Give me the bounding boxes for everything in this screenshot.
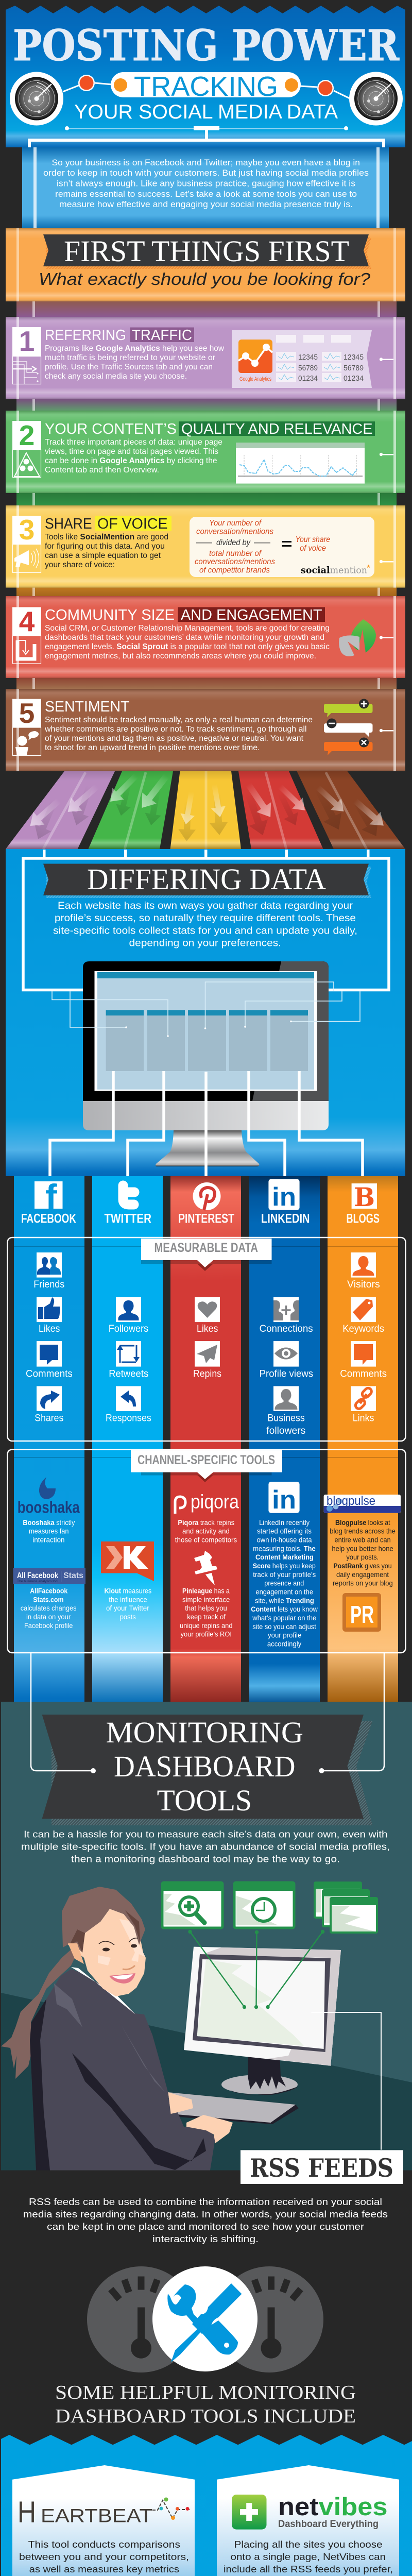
heading: share of voice xyxy=(45,516,171,532)
icon: speech bubbles positive negative neutral xyxy=(324,699,373,755)
heading: sentiment: SENTIMENT xyxy=(45,699,130,715)
logo: netvibes: netvibes xyxy=(278,2493,387,2521)
heading: community size and engagement: COMMUNITY SIZE xyxy=(45,607,175,623)
text: blogpulse xyxy=(330,1519,396,1587)
ribbon: monitoring dashboard tools xyxy=(42,1715,373,1825)
metric: facebook shares: Shares xyxy=(35,1413,63,1424)
logo: netvibes: Dashboard Everything xyxy=(278,2519,379,2530)
connector dot xyxy=(380,560,393,563)
text: sentiment paragraph: to shoot for an upward trend in positive mentions over time. xyxy=(45,743,260,752)
metric: linkedin business followers: followers xyxy=(266,1426,305,1436)
text: linkedin tools: presence and xyxy=(264,1580,304,1587)
text: linkedin tools: measuring tools. The xyxy=(253,1545,316,1552)
metric: facebook shares xyxy=(35,1386,63,1424)
logo: booshaka: booshaka xyxy=(18,1498,80,1517)
text: monitoring paragraph: multiple site-specific tools. If you have an abundance of social media profiles, xyxy=(21,1841,390,1852)
connector: thin lines into monitor xyxy=(52,982,360,1036)
text: linkedin tools: LinkedIn recently xyxy=(259,1519,310,1527)
column header: twitter xyxy=(104,1185,151,1226)
text: community paragraph: engagement metrics, but also recommends areas where you could improve. xyxy=(45,652,316,660)
illustration: woman at computer xyxy=(1,1887,233,2170)
text: blogpulse: daily engagement xyxy=(336,1571,389,1579)
metric: blog links xyxy=(351,1386,376,1424)
panel: 2 content quality xyxy=(6,411,405,493)
logo: allfacebook stats: All Facebook xyxy=(17,1571,58,1580)
text: community paragraph: engagement levels. Social Sprout is a popular tool that not only gives you basic xyxy=(45,642,330,651)
text: linkedin tools: engagement on the xyxy=(255,1588,313,1596)
text: pinleague: simple interface xyxy=(182,1596,230,1603)
text: booshaka: measures fan xyxy=(29,1528,69,1535)
text: linkedin tools: Score helps you keep xyxy=(253,1562,316,1570)
callout: share of voice equation: divided by xyxy=(216,538,251,547)
metric: facebook likes xyxy=(37,1297,62,1334)
metric: twitter retweets: Retweets xyxy=(109,1368,148,1379)
text: intro paragraph: isn’t always enough. Like any business practice, gauging how effective it is xyxy=(57,178,355,189)
icon: box with down arrow xyxy=(12,636,41,664)
panel: first things first xyxy=(6,228,405,301)
callout: share of voice equation xyxy=(190,517,374,577)
text: klout: the influence xyxy=(109,1596,147,1603)
connector bands between panels xyxy=(16,301,397,689)
text: heartbeat description xyxy=(19,2539,189,2576)
metric: twitter followers xyxy=(109,1297,148,1334)
logo: piqora: piqora xyxy=(191,1491,239,1513)
text: booshaka: Booshaka strictly xyxy=(23,1519,75,1527)
panel: differing data xyxy=(6,849,405,1176)
arrows: five coloured ramps into differing data xyxy=(6,770,405,849)
text: differing data paragraph xyxy=(53,900,357,949)
metric: pinterest repins xyxy=(193,1341,221,1379)
ribbon: monitoring dashboard tools: TOOLS xyxy=(157,1784,252,1817)
card: heartbeat xyxy=(12,2465,195,2576)
icon: right radar xyxy=(349,72,403,126)
subtitle: your social media data: YOUR SOCIAL MEDIA DATA xyxy=(74,101,338,123)
text: piqora: those of competitors xyxy=(175,1536,237,1544)
callout: share of voice equation: Your share xyxy=(296,535,330,544)
logo: postrank: PR xyxy=(350,1601,374,1629)
icon: clock window xyxy=(234,1883,294,1928)
text: differing data paragraph: depending on your preferences. xyxy=(129,938,281,949)
logo: booshaka xyxy=(18,1477,80,1517)
chart: content line chart xyxy=(236,443,365,484)
connector: lines from columns to ribbon xyxy=(31,1653,384,1773)
text: community paragraph: Social CRM, or Customer Relationship Management, tools are good for creating xyxy=(45,624,330,633)
icon: stacked windows xyxy=(315,1883,377,1933)
text: klout xyxy=(104,1587,152,1621)
text: content quality paragraph: views, time on page and total pages viewed. This xyxy=(45,447,218,456)
text: intro paragraph: So your business is on Facebook and Twitter; maybe you even have a blog in xyxy=(52,158,360,167)
metric: linkedin business followers: Business xyxy=(267,1413,305,1424)
text: share of voice paragraph: can use a simple equation to get xyxy=(45,551,161,560)
ribbon: monitoring dashboard tools: MONITORING xyxy=(106,1716,303,1749)
connector dot xyxy=(380,636,393,639)
label: channel-specific tools: CHANNEL-SPECIFIC TOOLS xyxy=(138,1453,275,1467)
panel: 1 referring traffic xyxy=(6,317,405,399)
logo: social sprout xyxy=(339,619,376,656)
logo: linkedin tools: in xyxy=(272,1485,296,1514)
panel: intro xyxy=(22,147,389,228)
icons: small stat tiles xyxy=(276,335,351,382)
illustration: keyboard xyxy=(168,2092,299,2124)
text: share of voice paragraph: for figuring out this data. And you xyxy=(45,542,165,551)
metric: facebook likes: Likes xyxy=(39,1324,60,1334)
heading: referring traffic: TRAFFIC xyxy=(132,327,192,344)
number badge 3 xyxy=(12,514,41,546)
metric: facebook friends: Friends xyxy=(33,1279,64,1290)
callout: share of voice equation: Your number of xyxy=(209,519,262,528)
text: linkedin tools: your profile xyxy=(268,1632,301,1639)
logo: postrank xyxy=(342,1593,381,1632)
icon: megaphone xyxy=(12,544,41,573)
logo: allfacebook stats: The business analytics tool xyxy=(17,1580,59,1583)
text: referring traffic paragraph xyxy=(45,344,225,381)
metric: blog keywords xyxy=(342,1297,384,1334)
text: netvibes description: include all the RSS feeds you prefer, xyxy=(224,2564,393,2574)
text: referring traffic paragraph: much traffic is being referred to your website or xyxy=(45,353,215,362)
text: intro paragraph xyxy=(43,158,369,209)
ribbon: first things first: FIRST THINGS FIRST xyxy=(64,234,349,268)
column header: pinterest xyxy=(178,1182,234,1226)
icon: left red node xyxy=(78,75,95,91)
subtitle: tracking pill: TRACKING xyxy=(134,71,278,102)
ribbon: differing data: DIFFERING DATA xyxy=(87,862,326,896)
heading: community size and engagement: AND ENGAGEMENT xyxy=(181,607,322,623)
connector: radar to tracking pill xyxy=(63,83,350,98)
text: stat numbers: 01234 xyxy=(344,374,364,383)
metric: blog comments xyxy=(340,1341,387,1379)
icon: gauges with wrench and screwdriver xyxy=(87,2266,323,2372)
text: monitoring paragraph: then a monitoring dashboard tool may be the way to go. xyxy=(71,1853,340,1864)
text: booshaka: interaction xyxy=(32,1536,65,1544)
panel: helpful tools xyxy=(1,2435,412,2576)
text: linkedin tools: site so you can adjust xyxy=(252,1623,316,1631)
heading: community size and engagement xyxy=(45,607,325,623)
text: sentiment paragraph: whether comments are positive or not. To track sentiment, go through all xyxy=(44,725,306,734)
connector: rss line xyxy=(312,2012,381,2150)
text: heartbeat description: as well as measures key metrics xyxy=(29,2564,179,2574)
text: stat numbers: 12345 xyxy=(298,353,318,362)
text: booshaka xyxy=(23,1519,75,1544)
text: referring traffic paragraph: check any social media site you choose. xyxy=(45,372,187,381)
logo: netvibes xyxy=(232,2493,387,2530)
text: klout: Klout measures xyxy=(104,1587,152,1595)
text: content quality paragraph: Content tab and then Overview. xyxy=(45,466,159,474)
column header: pinterest: PINTEREST xyxy=(178,1212,234,1226)
text: referring traffic paragraph: Programs like Google Analytics help you see how xyxy=(45,344,225,353)
text: pinleague: keep track of xyxy=(187,1613,226,1621)
heading: content quality xyxy=(45,421,375,437)
number badge 4 xyxy=(12,605,41,637)
text: stat numbers: 01234 xyxy=(298,374,318,383)
metric: linkedin connections: Connections xyxy=(260,1324,313,1334)
text: sentiment paragraph xyxy=(44,716,313,752)
logo: linkedin tools xyxy=(268,1482,300,1514)
icon: traffic arrows xyxy=(12,357,41,384)
metric: linkedin profile views xyxy=(260,1341,313,1379)
text: referring traffic paragraph: profile. Use the Traffic Sources tab and you can xyxy=(45,363,213,371)
metric: blog visitors: Visitors xyxy=(347,1279,380,1290)
logo: socialmention: * xyxy=(367,563,370,573)
text: allfacebook stats: Stats.com xyxy=(33,1596,64,1603)
text: pinleague: your profile’s ROI xyxy=(180,1631,232,1638)
ribbon: differing data xyxy=(43,862,371,898)
icon: person with speech bubble xyxy=(12,727,41,755)
text: blogpulse: help you better hone xyxy=(332,1545,393,1552)
column header: facebook: f xyxy=(45,1177,57,1216)
text: rss paragraph xyxy=(23,2196,388,2244)
callout: share of voice equation: conversations/mentions xyxy=(195,557,275,566)
text: klout: of your Twitter xyxy=(106,1604,149,1612)
text: monitoring paragraph: It can be a hassle for you to measure each site’s data on your own, even with xyxy=(24,1828,387,1839)
column header: facebook: FACEBOOK xyxy=(21,1212,76,1226)
callout: share of voice equation: total number of xyxy=(209,549,262,558)
label: measurable data xyxy=(141,1239,272,1271)
callout: share of voice equation: conversation/mentions xyxy=(196,528,273,536)
icon: zoom window xyxy=(162,1883,222,1928)
logo: socialmention: socialmention xyxy=(301,565,367,576)
number badge 4: 4 xyxy=(19,605,35,637)
column header: facebook xyxy=(21,1177,76,1226)
icon: push pin xyxy=(194,1551,217,1585)
connector: thick lines to social columns xyxy=(50,1071,363,1176)
text: netvibes description: onto a single page, NetVibes can xyxy=(231,2551,386,2562)
metric: twitter responses: Responses xyxy=(106,1413,151,1424)
text: share of voice paragraph: your share of voice: xyxy=(45,561,115,569)
logo: klout xyxy=(101,1541,154,1581)
text: intro paragraph: remains essential to success. Let’s take a look at some tools you can use to xyxy=(55,189,357,199)
metric: pinterest repins: Repins xyxy=(193,1368,221,1379)
illustration: monitor xyxy=(184,1947,341,2095)
heading: share of voice: SHARE xyxy=(45,516,92,532)
text: sentiment paragraph: of your mentions and tag them as positive, negative or neutral. You want xyxy=(45,734,304,743)
text: content quality paragraph: Track three important pieces of data: unique page xyxy=(45,438,222,447)
number badge 1: 1 xyxy=(19,325,35,357)
metric: facebook friends xyxy=(33,1252,64,1290)
text: piqora: and activity and xyxy=(182,1528,230,1535)
metric: linkedin business followers xyxy=(266,1386,305,1436)
panel: monitoring dashboard tools xyxy=(1,1653,412,2184)
text: stat numbers: 12345 xyxy=(344,353,364,362)
text: pinleague xyxy=(180,1587,233,1638)
panel: hero header xyxy=(6,6,405,147)
text: content quality paragraph: can be done in Google Analytics by clicking the xyxy=(45,456,217,465)
column header: linkedin xyxy=(261,1179,310,1226)
column header: blogs: BLOGS xyxy=(346,1212,380,1226)
logo: heartbeat: EARTBEAT xyxy=(41,2505,152,2527)
text: stat numbers: 56789 xyxy=(344,364,364,372)
connector: windows to monitor xyxy=(188,1930,324,2008)
text: linkedin tools: what’s popular on the xyxy=(252,1614,316,1622)
text: allfacebook stats: AllFacebook xyxy=(30,1587,68,1595)
icon: left radar xyxy=(10,72,63,126)
ribbon: monitoring dashboard tools: DASHBOARD xyxy=(114,1750,296,1783)
text: piqora xyxy=(175,1519,237,1544)
text: netvibes description: Placing all the sites you choose xyxy=(234,2539,383,2550)
text: rss paragraph: interactivity is shifting. xyxy=(152,2233,259,2244)
heading: content quality: QUALITY AND RELEVANCE xyxy=(181,421,373,437)
metric: linkedin connections xyxy=(260,1297,313,1334)
text: linkedin tools: Content Marketing xyxy=(255,1553,314,1561)
text: klout: posts xyxy=(120,1613,136,1621)
text: linkedin tools: own in-house data xyxy=(256,1536,312,1544)
metric: blog keywords: Keywords xyxy=(342,1324,384,1334)
panel: 5 sentiment xyxy=(6,689,405,771)
column header: twitter: TWITTER xyxy=(104,1212,151,1226)
text: blogpulse: your posts. xyxy=(346,1553,379,1561)
text: allfacebook stats: Facebook profile xyxy=(24,1622,73,1630)
icon: right red node xyxy=(317,80,334,96)
text: linkedin tools: track of your profile’s xyxy=(253,1571,316,1579)
text: allfacebook stats xyxy=(21,1587,77,1630)
heading: content quality: YOUR CONTENT’S xyxy=(45,421,177,437)
text: blogpulse: reports on your blog xyxy=(333,1580,393,1587)
heading: referring traffic: REFERRING xyxy=(45,327,126,344)
illustration: google analytics stats panel xyxy=(232,330,372,388)
metric: twitter responses xyxy=(106,1386,151,1424)
text: piqora: Piqora track repins xyxy=(178,1519,234,1527)
subtitle: what exactly: What exactly should you be looking for? xyxy=(39,269,371,289)
panel: social media columns xyxy=(7,1176,406,1702)
callout: share of voice equation: of voice xyxy=(300,544,326,553)
metric: blog links: Links xyxy=(353,1413,374,1424)
text: rss paragraph: RSS feeds can be used to combine the information received on your social xyxy=(29,2196,382,2207)
text: differing data paragraph: profile’s success, so naturally they require different tools. These xyxy=(55,912,356,924)
text: linkedin tools: accordingly xyxy=(267,1640,301,1648)
label: measurable data: MEASURABLE DATA xyxy=(154,1241,258,1255)
column header: blogs: B xyxy=(354,1182,375,1212)
heading: share of voice: OF VOICE xyxy=(97,516,168,532)
connector dot xyxy=(380,358,393,361)
number badge 1 xyxy=(12,325,41,357)
metric: facebook comments xyxy=(26,1341,73,1379)
text: sentiment paragraph: Sentiment should be tracked manually, as only a real human can determine xyxy=(45,716,313,724)
connector dot xyxy=(380,729,393,732)
metric: facebook comments: Comments xyxy=(26,1368,73,1379)
text: rss paragraph: media sites regarding changing data. In other words, your social media feeds xyxy=(23,2209,388,2219)
logo: allfacebook stats: Stats xyxy=(63,1571,83,1580)
heading: some helpful monitoring dashboard tools: SOME HELPFUL MONITORING xyxy=(55,2382,356,2403)
text: share of voice paragraph xyxy=(45,533,168,569)
text: rss paragraph: can be kept in one place and monitored to see how your customer xyxy=(47,2221,364,2232)
connector dot xyxy=(380,453,393,456)
text: allfacebook stats: calculates changes xyxy=(21,1604,77,1612)
text: pinleague: Pinleague has a xyxy=(182,1587,230,1595)
panel: 4 community size xyxy=(6,596,405,678)
column header: linkedin: LINKEDIN xyxy=(261,1212,310,1226)
callout: share of voice equation: of competitor brands xyxy=(199,566,270,575)
icon: google analytics logo xyxy=(238,340,272,382)
number badge 2 xyxy=(12,419,41,451)
text: stat numbers: 56789 xyxy=(298,364,318,372)
text: community paragraph: dashboards that track your customers’ data while monitoring your growth and xyxy=(45,633,324,642)
text: stat numbers xyxy=(298,353,364,383)
metric: linkedin profile views: Profile views xyxy=(260,1368,313,1379)
column header: linkedin: in xyxy=(272,1182,296,1211)
number badge 5: 5 xyxy=(19,697,35,729)
connector: bracket to intro xyxy=(28,126,385,147)
text: blogpulse: Blogpulse looks at xyxy=(335,1519,390,1527)
text: netvibes description xyxy=(224,2539,393,2576)
number badge 3: 3 xyxy=(19,514,35,546)
text: blogpulse: blog trends across the xyxy=(330,1528,396,1535)
logo: blogpulse xyxy=(324,1494,401,1513)
text: linkedin tools: site, while Trending xyxy=(255,1597,314,1604)
text: pinleague: unique repins and xyxy=(180,1622,233,1630)
number badge 5 xyxy=(12,697,41,729)
logo: allfacebook stats xyxy=(13,1568,85,1584)
text: intro paragraph: measure how effective and engaging your social media presence truly is. xyxy=(59,199,353,209)
logo: piqora xyxy=(175,1491,239,1514)
text: allfacebook stats: in data on your xyxy=(26,1613,71,1621)
panel: 3 share of voice xyxy=(6,505,405,588)
number badge 2: 2 xyxy=(19,419,35,451)
icon: triangle of dots xyxy=(12,449,41,477)
metric: pinterest likes: Likes xyxy=(197,1324,218,1334)
card: netvibes xyxy=(217,2465,399,2576)
heading: some helpful monitoring dashboard tools xyxy=(55,2382,356,2427)
metric: twitter followers: Followers xyxy=(109,1324,148,1334)
column header: blogs xyxy=(346,1182,380,1226)
text: community paragraph xyxy=(45,624,330,660)
label: rss feeds: RSS FEEDS xyxy=(250,2153,393,2183)
metric: blog comments: Comments xyxy=(340,1368,387,1379)
text: pinleague: that helps you xyxy=(185,1604,227,1612)
text: intro paragraph: order to keep in touch with your customers. But just having social media profiles xyxy=(43,168,369,178)
logo: heartbeat: H xyxy=(18,2496,36,2529)
text: linkedin tools: started offering its xyxy=(257,1528,312,1535)
text: heartbeat description: This tool conducts comparisons xyxy=(28,2539,180,2550)
label: channel-specific tools xyxy=(131,1450,282,1482)
metric: pinterest likes xyxy=(195,1297,220,1334)
icon: google analytics logo: Google Analytics xyxy=(239,376,271,382)
illustration: desktop monitor xyxy=(83,961,329,1166)
text: linkedin tools: Content lets you know xyxy=(251,1605,318,1613)
metric: twitter retweets xyxy=(109,1341,148,1379)
heading: some helpful monitoring dashboard tools: DASHBOARD TOOLS INCLUDE xyxy=(55,2405,356,2427)
metric: blog visitors xyxy=(347,1252,380,1290)
logo: blogpulse: blogpulse xyxy=(327,1494,375,1508)
logo: heartbeat xyxy=(18,2496,191,2529)
text: monitoring paragraph xyxy=(21,1828,390,1864)
heading: referring traffic xyxy=(45,327,194,344)
text: share of voice paragraph: Tools like SocialMention are good xyxy=(45,533,168,541)
text: differing data paragraph: site-specific tools collect stats for you and can update you daily, xyxy=(53,925,357,937)
text: linkedin tools xyxy=(251,1519,318,1648)
frame: channel-specific tools xyxy=(7,1450,406,1653)
text: differing data paragraph: Each website has its own ways you gather data regarding your xyxy=(58,900,353,911)
text: blogpulse: PostRank gives you xyxy=(333,1562,392,1570)
frame: measurable data xyxy=(7,1238,406,1441)
text: heartbeat description: between you and your competitors, xyxy=(19,2551,189,2562)
text: blogpulse: entire web and can xyxy=(335,1536,391,1544)
text: content quality paragraph xyxy=(45,438,222,474)
